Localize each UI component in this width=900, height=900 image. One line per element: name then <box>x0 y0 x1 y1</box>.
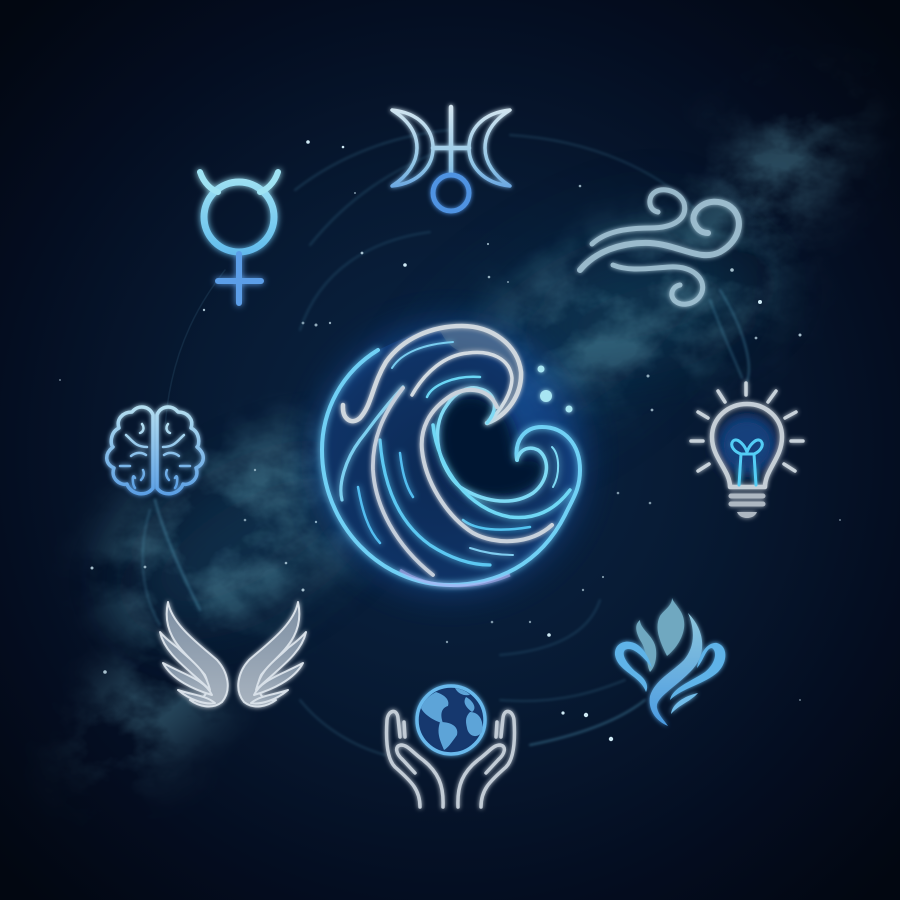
icon: wind swirls <box>580 190 739 304</box>
icon: water flame <box>615 598 725 726</box>
violet base highlight <box>400 570 510 586</box>
flame top leaf <box>658 598 684 656</box>
brain folds <box>120 424 147 488</box>
bulb filament <box>732 440 762 485</box>
flame main swoosh <box>650 613 702 726</box>
stars <box>59 140 841 741</box>
bulb base <box>731 496 763 504</box>
icon: hands holding earth <box>387 686 514 807</box>
icon: wings <box>160 602 306 706</box>
cyan outer ring <box>322 350 580 585</box>
dark centre of the spiral <box>438 394 545 499</box>
brain outline <box>107 407 153 494</box>
globe continents <box>421 688 482 750</box>
left wing <box>160 602 228 706</box>
flame small leaf <box>671 693 698 714</box>
icon: mercury symbol <box>200 172 278 303</box>
central wave emblem <box>318 326 582 590</box>
spray droplets <box>538 366 572 412</box>
emblem glow <box>318 326 582 590</box>
bulb outline <box>712 404 782 487</box>
nebula band <box>63 116 873 786</box>
bulb rays <box>691 383 803 471</box>
flame left curl <box>615 642 652 692</box>
globe <box>417 686 485 754</box>
crest translucent fill <box>440 328 521 423</box>
flame left leaf <box>636 620 656 672</box>
flame right curl <box>670 643 725 700</box>
icon: uranus symbol <box>392 107 510 211</box>
bulb glow <box>719 417 775 473</box>
icon: light bulb <box>691 383 803 518</box>
right hand <box>458 711 514 807</box>
emblem body <box>322 326 579 585</box>
left hand <box>387 711 443 807</box>
icon: brain <box>107 407 203 494</box>
silver inner swirl <box>373 388 552 575</box>
orbit arcs <box>143 130 749 755</box>
right wing <box>238 602 306 706</box>
silver crest <box>343 326 521 423</box>
